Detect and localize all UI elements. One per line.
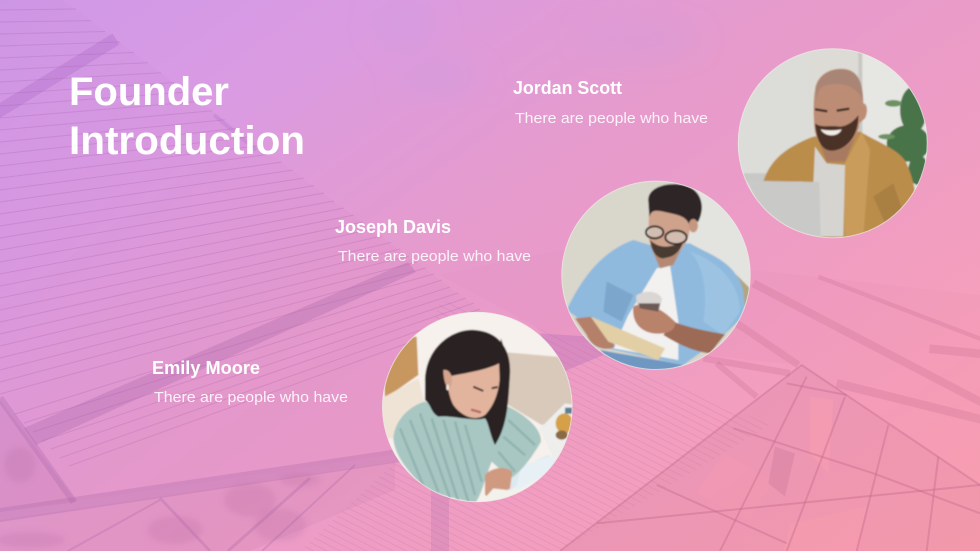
lower centre roof <box>300 300 770 551</box>
roof struts <box>703 277 980 420</box>
coffee cup <box>636 292 662 310</box>
arm and hand <box>663 322 725 353</box>
face <box>447 363 500 418</box>
founder: Jordan Scott text <box>513 78 708 127</box>
founder: Joseph Davis text: Joseph Davis <box>335 217 451 237</box>
left arm <box>575 317 615 349</box>
hair <box>648 184 702 227</box>
founder: Joseph Davis text <box>335 217 531 265</box>
smile <box>821 129 842 135</box>
jeans <box>600 350 683 370</box>
left roof ribs <box>0 9 488 466</box>
founder photo: Jordan Scott <box>738 48 928 238</box>
plant <box>878 87 930 185</box>
glasses <box>646 226 687 244</box>
eyes <box>815 109 849 111</box>
upper right roof <box>440 250 980 483</box>
founder: Jordan Scott text: Jordan Scott <box>513 78 622 98</box>
glass light panes <box>810 397 833 473</box>
neck <box>820 139 854 162</box>
sky clouds <box>375 1 700 98</box>
head <box>814 69 867 151</box>
foliage patches <box>0 447 320 548</box>
laptop <box>747 181 821 238</box>
beard <box>815 115 858 151</box>
foliage corner <box>0 400 77 512</box>
glass pyramid <box>560 365 980 551</box>
shirt <box>567 240 745 365</box>
tray and table <box>544 403 572 424</box>
hair front <box>498 338 504 378</box>
title: Introduction <box>69 119 305 163</box>
title: Founder <box>69 70 229 114</box>
t-shirt <box>813 147 845 237</box>
paper <box>591 317 665 360</box>
pyramid frame <box>560 365 980 551</box>
founder: Emily Moore text: There are people who have <box>154 389 348 406</box>
page <box>486 488 508 500</box>
upper left strut <box>0 39 116 113</box>
founder: Jordan Scott text: There are people who have <box>515 110 708 127</box>
hand <box>485 468 512 500</box>
bottom left glazing <box>0 462 395 551</box>
shirt <box>763 132 915 240</box>
founder photo: Joseph Davis <box>562 181 750 370</box>
pale circle rims <box>382 49 927 502</box>
bottom left struts <box>0 398 440 551</box>
middle roof strut <box>24 262 416 445</box>
title <box>69 70 305 163</box>
founder: Joseph Davis text: There are people who have <box>338 248 531 265</box>
t-shirt <box>613 265 678 360</box>
neck and face <box>650 244 682 269</box>
founder photo: Emily Moore <box>382 312 572 502</box>
left roof panel <box>0 0 480 512</box>
eye and lip details <box>473 387 498 391</box>
short strut behind title <box>214 115 256 150</box>
ear <box>689 219 698 232</box>
right structure <box>540 277 980 551</box>
dark reflection <box>768 447 795 497</box>
sweater <box>393 402 541 503</box>
founder: Emily Moore text <box>152 358 348 406</box>
founder: Emily Moore text: Emily Moore <box>152 358 260 378</box>
dark roof triangle <box>540 333 603 372</box>
hair back <box>425 330 510 445</box>
